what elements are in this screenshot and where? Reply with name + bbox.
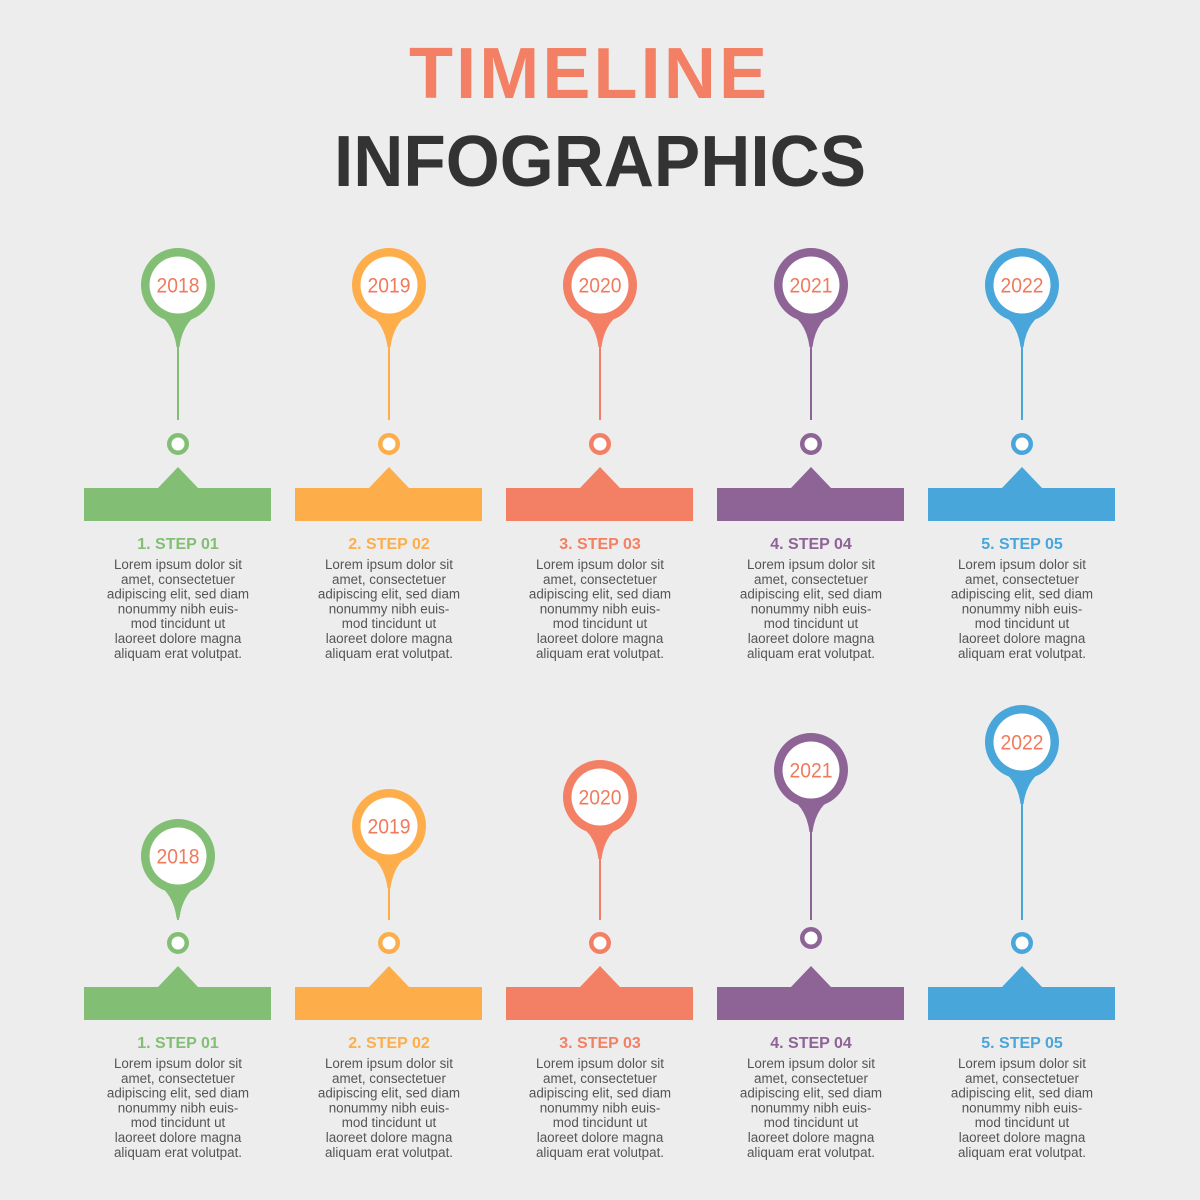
step title: 1. STEP 01 (137, 1035, 219, 1052)
text block: nonummy nibh euis- (118, 1100, 238, 1115)
icon: pin 2019 (352, 789, 426, 920)
step title: 4. STEP 04 (770, 536, 852, 553)
text block: amet, consectetuer (121, 1071, 235, 1086)
step title: 3. STEP 03 (559, 536, 641, 553)
text block: mod tincidunt ut (131, 1115, 226, 1130)
step title: 4. STEP 04 (770, 1035, 852, 1052)
item: 2021 top (717, 248, 904, 661)
text block: mod tincidunt ut (342, 1115, 437, 1130)
text block: mod tincidunt ut (975, 1115, 1070, 1130)
text block: laoreet dolore magna (115, 631, 242, 646)
icon: pin 2019: 2019 (368, 274, 410, 298)
text block: Lorem ipsum dolor sit (325, 557, 453, 572)
text block: nonummy nibh euis- (329, 601, 449, 616)
text block: laoreet dolore magna (326, 1130, 453, 1145)
text block: mod tincidunt ut (342, 616, 437, 631)
icon: pin 2018: 2018 (156, 274, 200, 298)
text block: aliquam erat volutpat. (747, 646, 875, 661)
icon: pin 2022 (985, 248, 1059, 420)
text block: amet, consectetuer (754, 1071, 868, 1086)
text block: laoreet dolore magna (959, 631, 1086, 646)
bar (717, 467, 904, 521)
text block: laoreet dolore magna (748, 1130, 875, 1145)
bar (506, 467, 693, 521)
item: 2021 bottom (717, 733, 904, 1160)
bar (295, 467, 482, 521)
text block: mod tincidunt ut (553, 1115, 648, 1130)
icon: ring marker (802, 929, 820, 947)
text block: nonummy nibh euis- (962, 1100, 1082, 1115)
text block: nonummy nibh euis- (329, 1100, 449, 1115)
bar (295, 966, 482, 1020)
icon: ring marker (380, 435, 398, 453)
text block: laoreet dolore magna (748, 631, 875, 646)
icon: ring marker (169, 435, 187, 453)
row 1: top timeline (84, 248, 1115, 661)
icon: pin 2021: 2021 (790, 274, 832, 298)
icon: pin 2022 (985, 705, 1059, 920)
item: 2018 top (84, 248, 271, 661)
text block: laoreet dolore magna (537, 631, 664, 646)
icon: ring marker (802, 435, 820, 453)
text block: Lorem ipsum dolor sit (114, 557, 242, 572)
item: 2022 bottom (928, 705, 1115, 1160)
bar (506, 966, 693, 1020)
text block: nonummy nibh euis- (751, 1100, 871, 1115)
icon: ring marker (169, 934, 187, 952)
text block: aliquam erat volutpat. (958, 1145, 1086, 1160)
text block: amet, consectetuer (543, 572, 657, 587)
text block: amet, consectetuer (121, 572, 235, 587)
text block: aliquam erat volutpat. (536, 1145, 664, 1160)
text block: amet, consectetuer (332, 1071, 446, 1086)
row 2: bottom timeline (84, 705, 1115, 1160)
text block: nonummy nibh euis- (540, 1100, 660, 1115)
text block: aliquam erat volutpat. (114, 646, 242, 661)
text block: aliquam erat volutpat. (325, 1145, 453, 1160)
text block: mod tincidunt ut (764, 616, 859, 631)
text block: nonummy nibh euis- (540, 601, 660, 616)
step title: 5. STEP 05 (981, 536, 1063, 553)
text block: Lorem ipsum dolor sit (536, 557, 664, 572)
item: 2020 top (506, 248, 693, 661)
text block: aliquam erat volutpat. (114, 1145, 242, 1160)
text block: nonummy nibh euis- (962, 601, 1082, 616)
text block: laoreet dolore magna (115, 1130, 242, 1145)
bar (928, 966, 1115, 1020)
text block: nonummy nibh euis- (751, 601, 871, 616)
text block: amet, consectetuer (754, 572, 868, 587)
text block: mod tincidunt ut (131, 616, 226, 631)
bar (717, 966, 904, 1020)
text block: Lorem ipsum dolor sit (747, 557, 875, 572)
text block: mod tincidunt ut (553, 616, 648, 631)
item: 2022 top (928, 248, 1115, 661)
icon: pin 2019: 2019 (368, 816, 410, 838)
title (334, 34, 866, 202)
text block: Lorem ipsum dolor sit (958, 1056, 1086, 1071)
text block: Lorem ipsum dolor sit (958, 557, 1086, 572)
text block: mod tincidunt ut (975, 616, 1070, 631)
icon: ring marker (380, 934, 398, 952)
item: 2020 bottom (506, 760, 693, 1160)
icon: pin 2020: 2020 (578, 274, 622, 298)
text block: mod tincidunt ut (764, 1115, 859, 1130)
icon: pin 2022: 2022 (1000, 274, 1044, 298)
text block: amet, consectetuer (965, 1071, 1079, 1086)
icon: pin 2020: 2020 (578, 786, 622, 810)
text block: amet, consectetuer (965, 572, 1079, 587)
step title: 3. STEP 03 (559, 1035, 641, 1052)
item: 2019 bottom (295, 789, 482, 1160)
text block: Lorem ipsum dolor sit (325, 1056, 453, 1071)
icon: pin 2019 (352, 248, 426, 420)
icon: pin 2020 (563, 248, 637, 420)
text block: laoreet dolore magna (959, 1130, 1086, 1145)
step title: 2. STEP 02 (348, 536, 430, 553)
text block: adipiscing elit, sed diam (318, 587, 460, 602)
title: INFOGRAPHICS (334, 122, 866, 202)
icon: pin 2021: 2021 (790, 760, 832, 782)
icon: ring marker (591, 435, 609, 453)
step title: 1. STEP 01 (137, 536, 219, 553)
text block: amet, consectetuer (332, 572, 446, 587)
text block: adipiscing elit, sed diam (318, 1086, 460, 1101)
text block: laoreet dolore magna (537, 1130, 664, 1145)
text block: adipiscing elit, sed diam (740, 1086, 882, 1101)
step title: 5. STEP 05 (981, 1035, 1063, 1052)
icon: pin 2021 (774, 733, 848, 920)
text block: aliquam erat volutpat. (958, 646, 1086, 661)
text block: Lorem ipsum dolor sit (747, 1056, 875, 1071)
item: 2019 top (295, 248, 482, 661)
text block: nonummy nibh euis- (118, 601, 238, 616)
icon: ring marker (1013, 934, 1031, 952)
text block: aliquam erat volutpat. (536, 646, 664, 661)
icon: ring marker (1013, 435, 1031, 453)
text block: adipiscing elit, sed diam (107, 587, 249, 602)
icon: pin 2021 (774, 248, 848, 420)
step title: 2. STEP 02 (348, 1035, 430, 1052)
bar (84, 467, 271, 521)
text block: adipiscing elit, sed diam (740, 587, 882, 602)
icon: pin 2018: 2018 (156, 846, 200, 868)
icon: ring marker (591, 934, 609, 952)
text block: adipiscing elit, sed diam (951, 587, 1093, 602)
text block: adipiscing elit, sed diam (107, 1086, 249, 1101)
text block: aliquam erat volutpat. (747, 1145, 875, 1160)
text block: adipiscing elit, sed diam (529, 587, 671, 602)
icon: pin 2022: 2022 (1000, 732, 1044, 754)
text block: aliquam erat volutpat. (325, 646, 453, 661)
icon: pin 2020 (563, 760, 637, 920)
bar (84, 966, 271, 1020)
text block: Lorem ipsum dolor sit (114, 1056, 242, 1071)
text block: adipiscing elit, sed diam (529, 1086, 671, 1101)
item: 2018 bottom (84, 819, 271, 1160)
text block: laoreet dolore magna (326, 631, 453, 646)
bar (928, 467, 1115, 521)
text block: amet, consectetuer (543, 1071, 657, 1086)
text block: Lorem ipsum dolor sit (536, 1056, 664, 1071)
icon: pin 2018 (141, 819, 215, 920)
title: TIMELINE (409, 34, 767, 114)
text block: adipiscing elit, sed diam (951, 1086, 1093, 1101)
icon: pin 2018 (141, 248, 215, 420)
